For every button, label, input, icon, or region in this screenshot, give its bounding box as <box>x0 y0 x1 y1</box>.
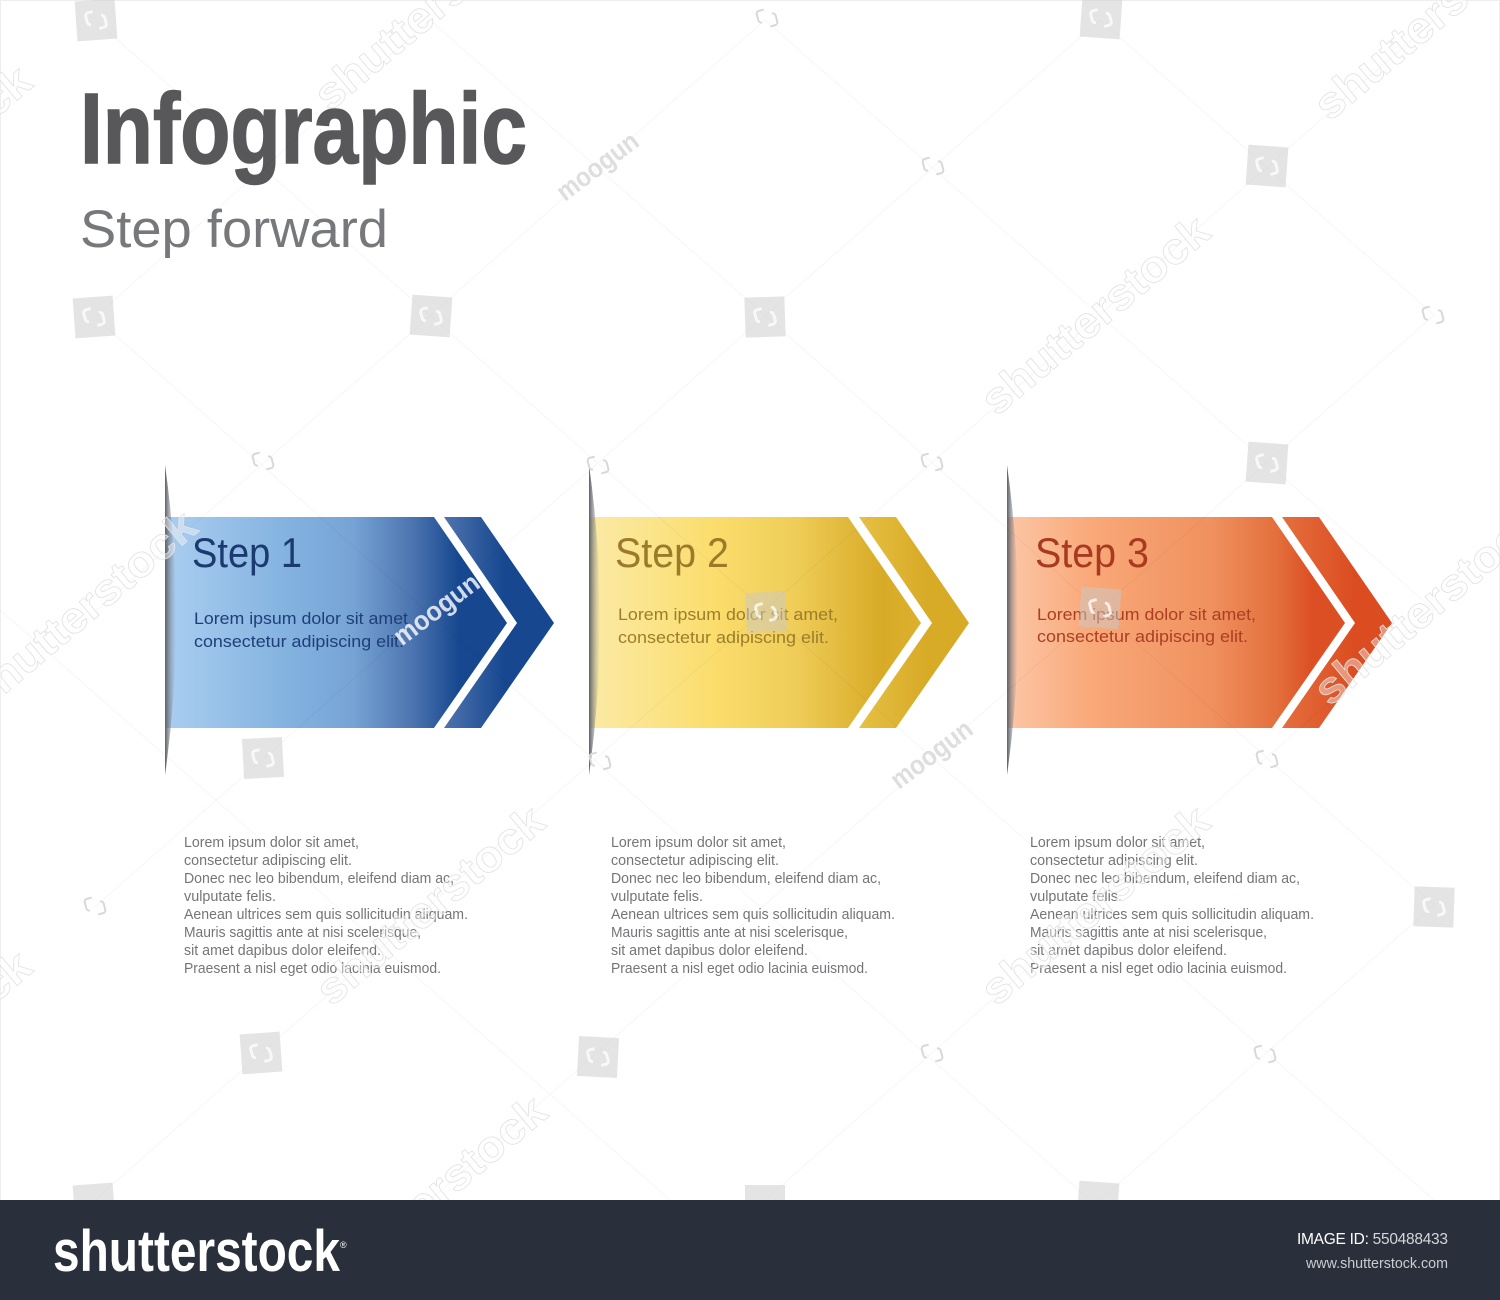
text block: step 3 details: Aenean ultrices sem quis sollicitudin aliquam. <box>1030 907 1314 923</box>
main arrow body <box>1008 517 1345 728</box>
text block: step 1 details: Praesent a nisl eget odio lacinia euismod. <box>184 961 441 977</box>
watermark small icons <box>84 7 1444 1065</box>
text block: step 3 details: Praesent a nisl eget odio lacinia euismod. <box>1030 961 1287 977</box>
text block: step 2 details: sit amet dapibus dolor eleifend. <box>611 943 808 959</box>
step 2 description: consectetur adipiscing elit. <box>618 628 829 647</box>
text block: step 2 details: vulputate felis. <box>611 889 703 905</box>
watermark wordmarks: shutterstock <box>972 796 1220 1015</box>
main arrow body <box>590 517 921 728</box>
watermark wordmarks: shutterstock <box>972 206 1220 425</box>
text block: step 3 details: Mauris sagittis ante at nisi scelerisque, <box>1030 925 1267 941</box>
text block: step 3 details: Lorem ipsum dolor sit amet, <box>1030 835 1205 851</box>
footer bar <box>0 1200 1500 1300</box>
step 2 description: Lorem ipsum dolor sit amet, <box>618 605 838 624</box>
watermark moogun: moogun <box>884 714 978 795</box>
panel: step 1 arrow <box>165 465 554 775</box>
watermark wordmarks: shutterstock <box>309 1086 557 1300</box>
text block: step 3 details: Donec nec leo bibendum, eleifend diam ac, <box>1030 871 1300 887</box>
fold shadow <box>1007 465 1018 775</box>
watermark moogun: moogun <box>387 567 485 651</box>
watermark square glyphs <box>83 7 1445 1068</box>
text block: step 2 details: Praesent a nisl eget odio lacinia euismod. <box>611 961 868 977</box>
second chevron <box>1282 517 1392 728</box>
panel: step 2 arrow <box>589 465 969 775</box>
main arrow body <box>166 517 507 728</box>
step 1 description: consectetur adipiscing elit. <box>194 632 404 651</box>
text block: step 1 details: consectetur adipiscing elit. <box>184 853 352 869</box>
watermark moogun: moogun <box>550 126 644 207</box>
text block: step 2 details: Aenean ultrices sem quis sollicitudin aliquam. <box>611 907 895 923</box>
text block: step 1 details: Donec nec leo bibendum, eleifend diam ac, <box>184 871 454 887</box>
second chevron <box>859 517 969 728</box>
footer logo: shutterstock <box>53 1219 341 1284</box>
step 1 heading: Step 1 <box>192 529 302 576</box>
title: Infographic <box>80 73 527 185</box>
watermark wordmarks: shutterstock <box>307 796 555 1015</box>
fold shadow <box>165 465 176 775</box>
footer registered mark: ® <box>340 1240 347 1250</box>
text block: step 1 details: Aenean ultrices sem quis sollicitudin aliquam. <box>184 907 468 923</box>
footer site url: www.shutterstock.com <box>1305 1256 1448 1272</box>
fold shadow <box>589 465 600 775</box>
panel: step 3 arrow <box>1007 465 1392 775</box>
footer image id: IMAGE ID: 550488433 <box>1297 1231 1448 1248</box>
text block: step 1 details: Mauris sagittis ante at nisi scelerisque, <box>184 925 421 941</box>
step 3 heading: Step 3 <box>1035 529 1149 576</box>
text block: step 3 details: sit amet dapibus dolor eleifend. <box>1030 943 1227 959</box>
subtitle: Step forward <box>80 200 388 259</box>
text block: step 2 details: Mauris sagittis ante at nisi scelerisque, <box>611 925 848 941</box>
text block: step 1 details: sit amet dapibus dolor eleifend. <box>184 943 381 959</box>
step 3 description: Lorem ipsum dolor sit amet, <box>1037 605 1256 624</box>
second chevron <box>444 517 554 728</box>
step 2 heading: Step 2 <box>615 529 729 576</box>
text block: step 3 details: consectetur adipiscing elit. <box>1030 853 1198 869</box>
text block: step 1 details: Lorem ipsum dolor sit amet, <box>184 835 359 851</box>
text block: step 1 details: vulputate felis. <box>184 889 276 905</box>
text block: step 3 details: vulputate felis. <box>1030 889 1122 905</box>
text block: step 2 details: Donec nec leo bibendum, eleifend diam ac, <box>611 871 881 887</box>
text block: step 2 details: Lorem ipsum dolor sit amet, <box>611 835 786 851</box>
step 3 description: consectetur adipiscing elit. <box>1037 627 1248 646</box>
step 1 description: Lorem ipsum dolor sit amet <box>194 609 408 628</box>
text block: step 2 details: consectetur adipiscing elit. <box>611 853 779 869</box>
watermark moogun <box>387 126 978 795</box>
